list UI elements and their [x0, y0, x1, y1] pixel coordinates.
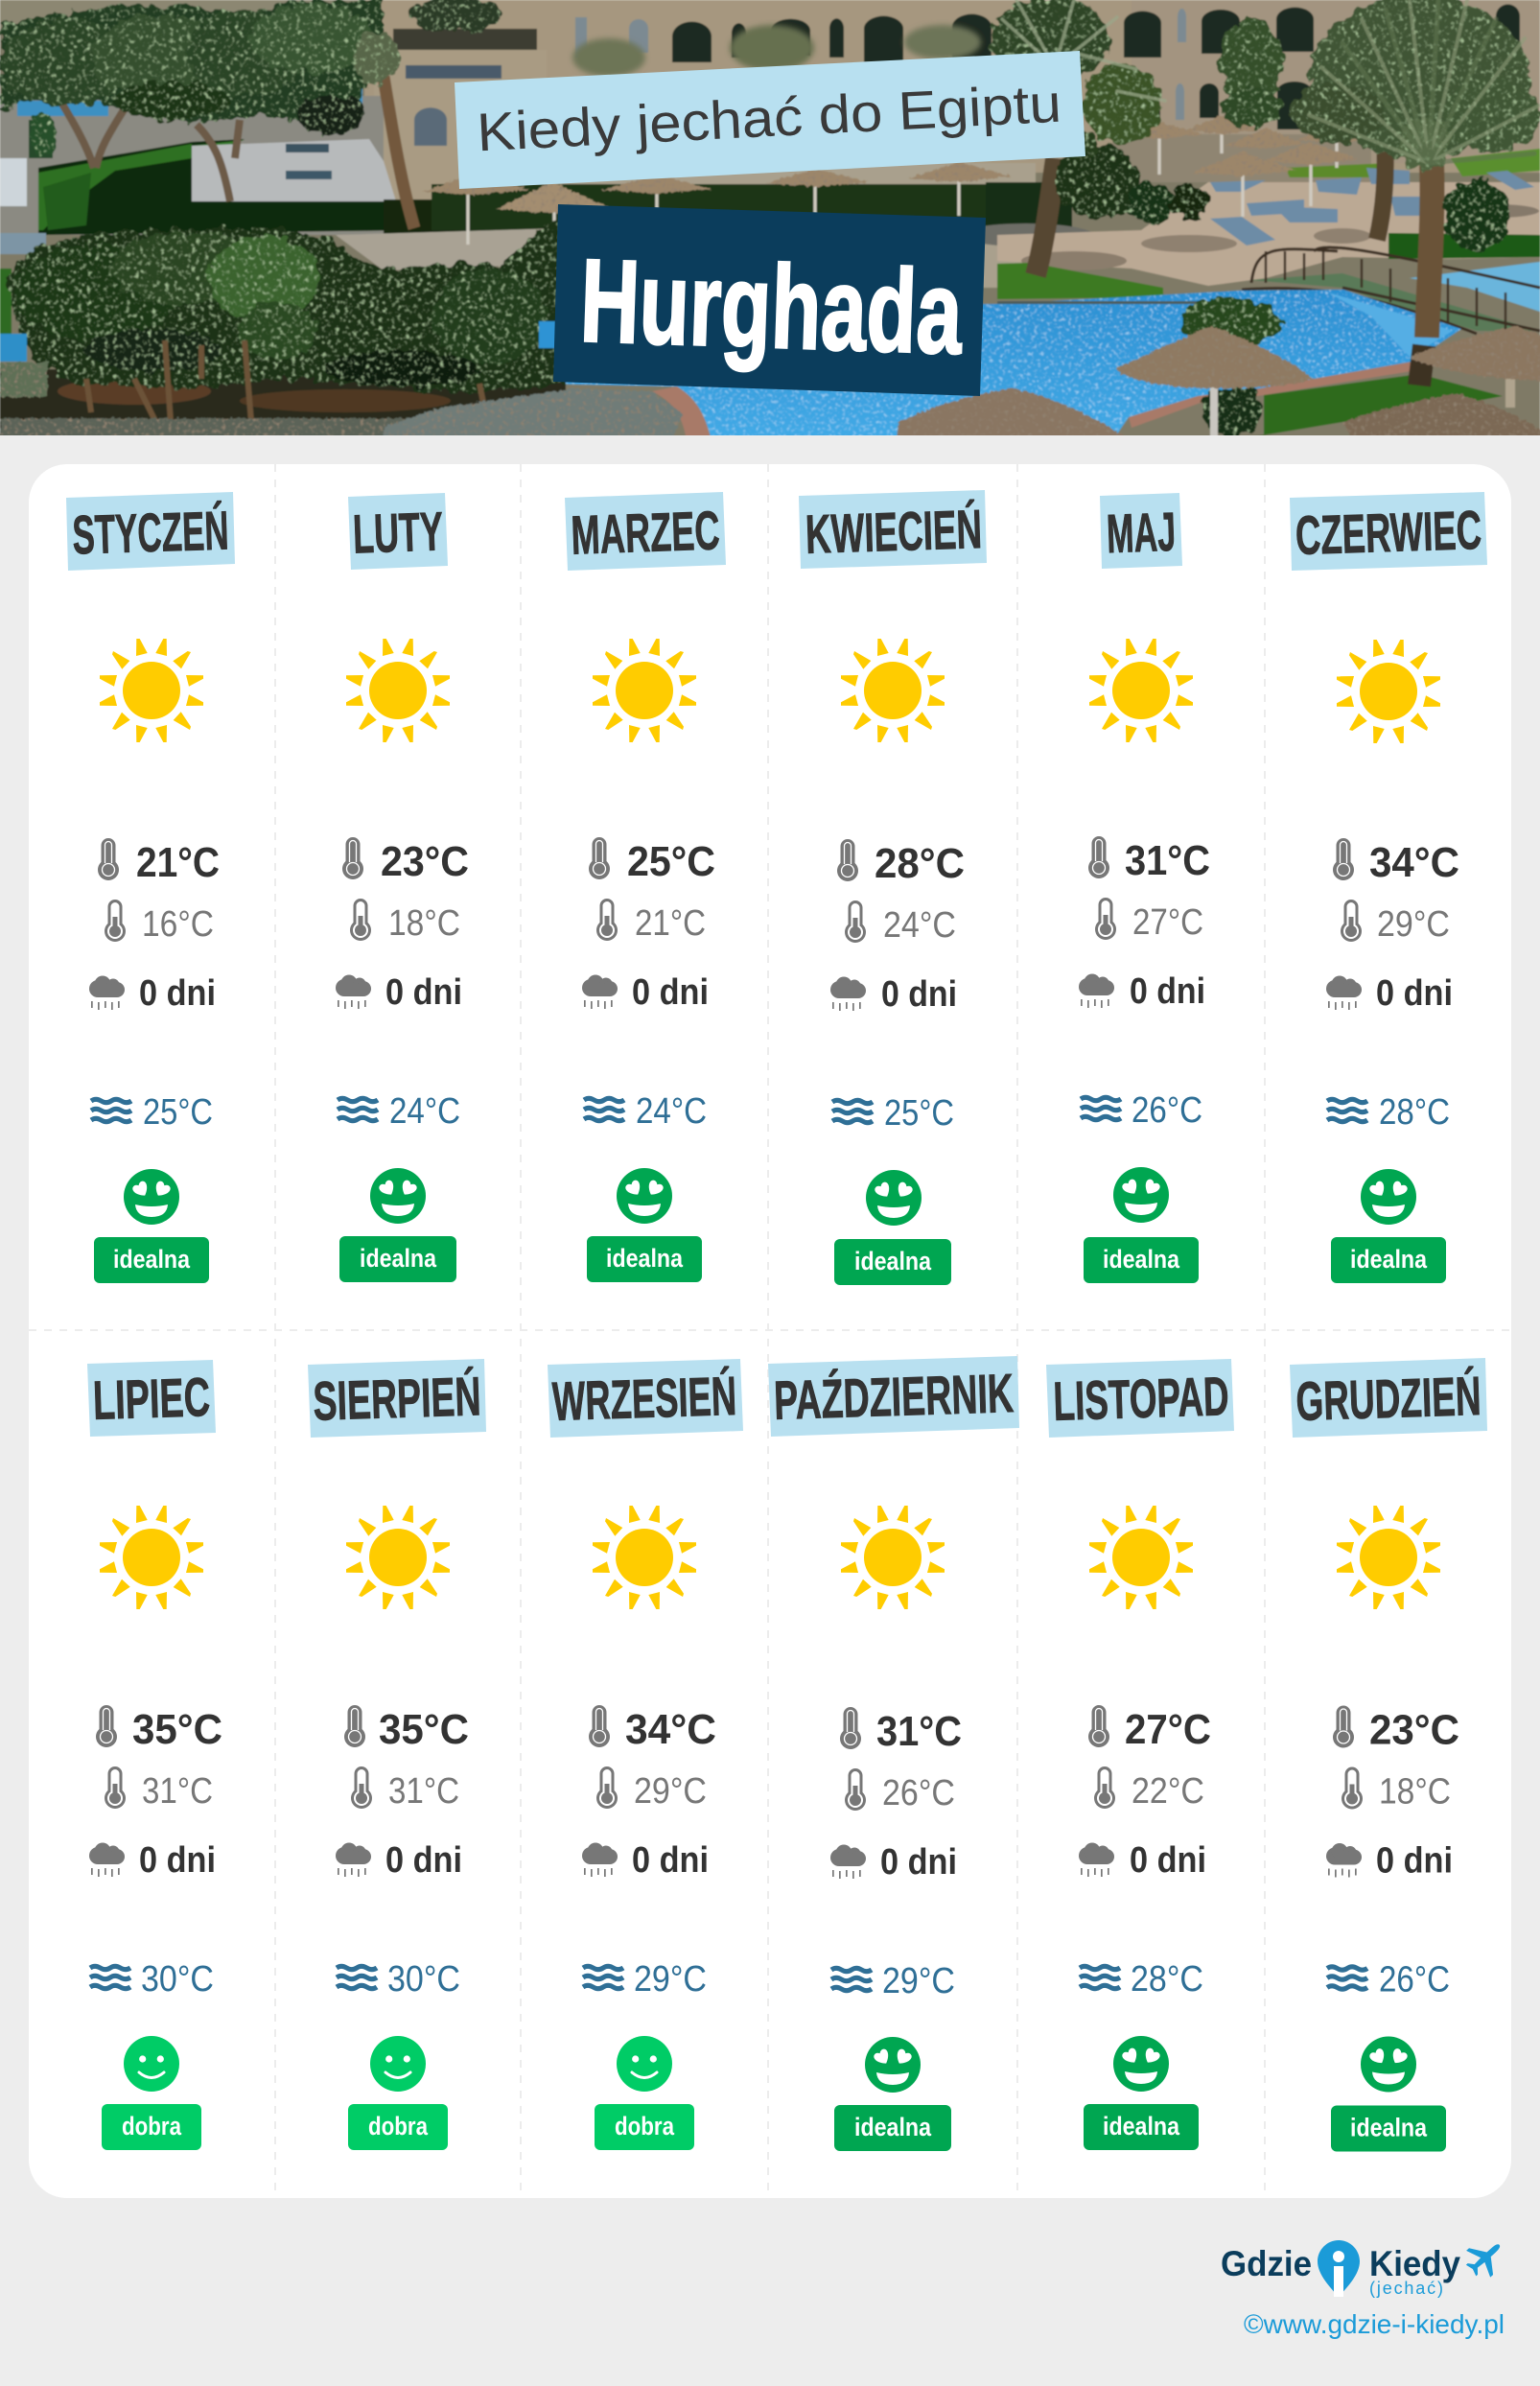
night temperature: 31°C [388, 1771, 459, 1812]
icon: heart-eyes face [617, 1168, 672, 1224]
rating badge: dobra [122, 2112, 182, 2140]
icon: thermometer low [845, 901, 866, 943]
rating badge: idealna [1103, 1245, 1180, 1274]
icon: rain cloud [89, 1843, 125, 1877]
icon: waves [831, 1968, 872, 1991]
icon: smiling face [370, 2036, 426, 2092]
building wall [0, 0, 1540, 203]
logo word: Kiedy: Kiedy [1369, 2244, 1460, 2283]
icon: waves [338, 1098, 378, 1121]
icon: rain cloud [1326, 1843, 1362, 1878]
month label: WRZESIEŃ [551, 1366, 737, 1433]
night temperature: 18°C [388, 903, 460, 944]
weather values [1079, 836, 1210, 1283]
rainy days: 0 dni [881, 974, 957, 1015]
icon: sun [1337, 1506, 1440, 1609]
water temperature: 30°C [141, 1959, 214, 2000]
rainy days: 0 dni [139, 973, 216, 1014]
month: LIPIEC [87, 1360, 222, 2150]
icon: thermometer high [1333, 838, 1354, 880]
bridge [1242, 247, 1540, 334]
lawns, right [997, 149, 1540, 299]
water temperature: 29°C [882, 1961, 955, 2001]
icon: waves [584, 1098, 624, 1121]
icon: waves [90, 1966, 130, 1989]
icon: sun [1089, 639, 1193, 742]
month: GRUDZIEŃ [1290, 1358, 1487, 2152]
night temperature: 21°C [635, 903, 706, 944]
icon: thermometer high [344, 1705, 365, 1747]
icon: thermometer high [98, 838, 119, 880]
logo: Gdzie i Kiedy (jechać) [1221, 2232, 1511, 2298]
icon: rain cloud [89, 976, 125, 1010]
day temperature: 31°C [876, 1708, 962, 1755]
palm trunks [384, 77, 1432, 386]
day temperature: 25°C [627, 838, 715, 885]
icon: heart-eyes face [1361, 1169, 1416, 1225]
month label: SIERPIEŃ [313, 1366, 481, 1433]
month label [768, 1356, 1019, 1437]
icon: thermometer low [105, 1766, 126, 1809]
weather values [1079, 1705, 1211, 2150]
icon: rain cloud [1079, 1843, 1114, 1877]
icon: thermometer low [350, 899, 371, 941]
icon: waves [583, 1966, 623, 1989]
month label: LUTY [352, 501, 444, 566]
icon: rain cloud [830, 976, 866, 1011]
icon: thermometer low [596, 899, 618, 941]
day temperature: 34°C [625, 1706, 716, 1753]
month: WRZESIEŃ [548, 1359, 743, 2150]
rating badge: idealna [1350, 2114, 1428, 2142]
rainy days: 0 dni [1376, 1841, 1453, 1882]
large thatched umbrellas [897, 326, 1540, 441]
day temperature: 35°C [132, 1706, 222, 1753]
icon: thermometer high [342, 837, 363, 879]
icon: heart-eyes face [865, 2037, 921, 2093]
icon: rain cloud [1079, 974, 1114, 1008]
month label: LISTOPAD [1053, 1366, 1229, 1433]
water temperature: 25°C [143, 1092, 213, 1133]
icon: location pin [1318, 2240, 1360, 2297]
rating badge: idealna [854, 1247, 932, 1275]
month: MARZEC [565, 492, 726, 1282]
rating badge [595, 2104, 694, 2150]
weather values [582, 1705, 716, 2150]
rainy days: 0 dni [880, 1842, 957, 1883]
icon: thermometer low [1342, 1766, 1363, 1809]
lawn by the pool [1259, 375, 1502, 435]
loungers [1210, 168, 1534, 246]
icon: heart-eyes face [1113, 1167, 1169, 1223]
lower tree mass [0, 216, 683, 441]
rating badge [1331, 1237, 1446, 1283]
weather values [1326, 838, 1459, 1283]
icon: smiling face [617, 2036, 672, 2092]
pool edge [652, 362, 1417, 441]
water temperature: 28°C [1131, 1959, 1203, 2000]
month label [1100, 493, 1182, 569]
icon: smiling face [124, 2036, 179, 2092]
small umbrellas [422, 115, 1374, 245]
night temperature: 26°C [882, 1773, 955, 1813]
month label [548, 1359, 743, 1438]
weather values [830, 1707, 962, 2151]
heading: city name [553, 204, 986, 396]
month label [66, 492, 235, 571]
night temperature: 31°C [142, 1771, 213, 1812]
icon: thermometer low [1095, 898, 1116, 940]
icon: waves [91, 1099, 131, 1122]
rainy days: 0 dni [385, 1840, 462, 1881]
month: LISTOPAD [1046, 1359, 1234, 2150]
rainy days: 0 dni [1130, 971, 1205, 1012]
website address: ©www.gdzie-i-kiedy.pl [1244, 2309, 1505, 2339]
icon: sun [100, 1506, 203, 1609]
icon: thermometer high [840, 1707, 861, 1749]
rating badge [102, 2104, 201, 2150]
month label: MAJ [1106, 502, 1177, 565]
month: LUTY [336, 493, 469, 1282]
water temperature: 26°C [1379, 1960, 1450, 2000]
rating badge [339, 1236, 456, 1282]
rating badge [834, 1239, 951, 1285]
icon: heart-eyes face [1113, 2036, 1169, 2092]
icon: thermometer high [96, 1705, 117, 1747]
upper left tree canopy [0, 0, 502, 201]
water temperature: 24°C [636, 1091, 707, 1132]
icon: rain cloud [830, 1845, 866, 1879]
day temperature: 27°C [1125, 1706, 1211, 1753]
icon: thermometer high [1333, 1705, 1354, 1747]
water temperature: 30°C [387, 1959, 460, 2000]
big palm crown [1290, 0, 1540, 171]
rating badge [1084, 1237, 1199, 1283]
month: STYCZEŃ [66, 492, 235, 1283]
weather values [89, 1705, 222, 2150]
month: MAJ [1079, 493, 1210, 1283]
rainy days: 0 dni [139, 1840, 216, 1881]
icon: rain cloud [582, 974, 618, 1009]
icon: thermometer low [1341, 900, 1362, 942]
icon: heart-eyes face [370, 1168, 426, 1224]
far pool [1410, 262, 1540, 312]
day temperature: 28°C [875, 840, 965, 887]
water temperature: 28°C [1379, 1092, 1450, 1133]
icon: sun [841, 1506, 945, 1609]
icon: sun [346, 639, 450, 742]
icon: thermometer low [351, 1766, 372, 1809]
night temperature: 16°C [142, 904, 214, 945]
icon: airplane [1459, 2232, 1511, 2283]
icon: thermometer low [845, 1768, 866, 1811]
night temperature: 27°C [1132, 902, 1203, 943]
icon: thermometer high [837, 839, 858, 881]
rating badge: idealna [1103, 2112, 1180, 2140]
icon: thermometer low [1094, 1766, 1115, 1809]
water temperature: 25°C [884, 1093, 954, 1134]
icon: waves [1327, 1099, 1367, 1122]
month label: KWIECIEŃ [805, 499, 983, 566]
icon: thermometer low [596, 1766, 618, 1809]
icon: waves [1080, 1966, 1120, 1989]
rating badge: idealna [360, 1244, 437, 1273]
header photo: hotel garden and pool [0, 0, 1540, 441]
logo word: (jechać): (jechać) [1369, 2279, 1443, 2298]
weather values [830, 839, 965, 1285]
icon: thermometer high [589, 837, 610, 879]
month label: LIPIEC [92, 1367, 211, 1432]
icon: rain cloud [336, 1843, 371, 1877]
middle terrace and hedges [336, 163, 1093, 288]
night temperature: 24°C [883, 905, 956, 946]
icon: waves [1081, 1097, 1121, 1120]
water temperature: 24°C [389, 1091, 460, 1132]
icon: sun [593, 639, 696, 742]
night temperature: 18°C [1379, 1772, 1451, 1813]
month: SIERPIEŃ [308, 1359, 486, 2150]
month label: STYCZEŃ [72, 500, 229, 567]
rating badge: dobra [368, 2112, 429, 2140]
round bushes [1056, 146, 1509, 435]
rating badge: idealna [113, 1245, 191, 1274]
rating badge [834, 2105, 951, 2151]
icon: heart-eyes face [124, 1169, 179, 1225]
icon: heart-eyes face [1361, 2037, 1416, 2093]
icon: rain cloud [582, 1843, 618, 1877]
month label: MARZEC [570, 500, 721, 567]
weather values [1326, 1705, 1459, 2152]
icon: sun [841, 639, 945, 742]
rainy days: 0 dni [1376, 973, 1453, 1014]
pavement, right [997, 134, 1540, 286]
day temperature: 23°C [381, 838, 469, 885]
rating badge: idealna [1350, 1245, 1428, 1274]
night temperature: 29°C [1377, 904, 1450, 945]
title tag [455, 51, 1085, 189]
night temperature: 29°C [634, 1771, 707, 1812]
month label [799, 490, 987, 569]
water temperature: 26°C [1132, 1090, 1202, 1131]
month label [87, 1360, 216, 1437]
icon: sun [1089, 1506, 1193, 1609]
month: KWIECIEŃ [799, 490, 987, 1285]
swimming pool [537, 290, 1461, 441]
rating badge [348, 2104, 448, 2150]
icon: heart-eyes face [866, 1170, 922, 1226]
rating badge: idealna [854, 2113, 932, 2141]
icon: thermometer low [105, 900, 126, 942]
day temperature: 31°C [1125, 837, 1210, 884]
icon: sun [1337, 640, 1440, 743]
weather values [582, 837, 715, 1282]
title tag: Kiedy jechać do Egiptu [476, 73, 1062, 162]
icon: rain cloud [1326, 976, 1362, 1010]
month label [1290, 1358, 1487, 1438]
icon: sun [100, 639, 203, 742]
icon: thermometer high [1088, 1705, 1109, 1747]
icon: sun [346, 1506, 450, 1609]
water temperature: 29°C [634, 1959, 707, 2000]
upper palm [991, 0, 1165, 159]
icon: thermometer high [589, 1705, 610, 1747]
rating badge [1084, 2104, 1199, 2150]
month label: PAŹDZIERNIK [773, 1363, 1015, 1432]
day temperature: 23°C [1369, 1707, 1459, 1753]
weather values [336, 837, 469, 1282]
rating badge: idealna [606, 1244, 684, 1273]
month label [348, 493, 448, 570]
rating badge [1331, 2106, 1446, 2152]
rainy days: 0 dni [632, 972, 709, 1013]
month: CZERWIEC [1290, 492, 1487, 1283]
rainy days: 0 dni [632, 1840, 709, 1881]
heading: city name: Hurghada [578, 235, 966, 380]
icon: waves [832, 1100, 873, 1123]
day temperature: 21°C [136, 839, 220, 886]
rating badge [94, 1237, 209, 1283]
month: PAŹDZIERNIK [768, 1356, 1019, 2151]
rating badge [587, 1236, 702, 1282]
weather values [89, 838, 220, 1283]
rating badge: dobra [615, 2112, 675, 2140]
month label [1046, 1359, 1234, 1438]
icon: rain cloud [336, 974, 371, 1009]
icon: thermometer high [1088, 836, 1109, 878]
month label [308, 1359, 486, 1438]
panel: climate calendar card [29, 464, 1511, 2198]
icon: waves [1327, 1967, 1367, 1989]
rainy days: 0 dni [385, 972, 462, 1013]
shrubs in front of the building [572, 25, 981, 77]
day temperature: 35°C [379, 1706, 469, 1753]
garden ground, left [0, 79, 414, 254]
icon: sun [593, 1506, 696, 1609]
night temperature: 22°C [1132, 1771, 1204, 1812]
month label [565, 492, 726, 571]
rainy days: 0 dni [1130, 1840, 1206, 1881]
day temperature: 34°C [1369, 839, 1459, 886]
logo word: Gdzie: Gdzie [1221, 2244, 1312, 2283]
icon: waves [337, 1966, 377, 1989]
weather values [336, 1705, 469, 2150]
